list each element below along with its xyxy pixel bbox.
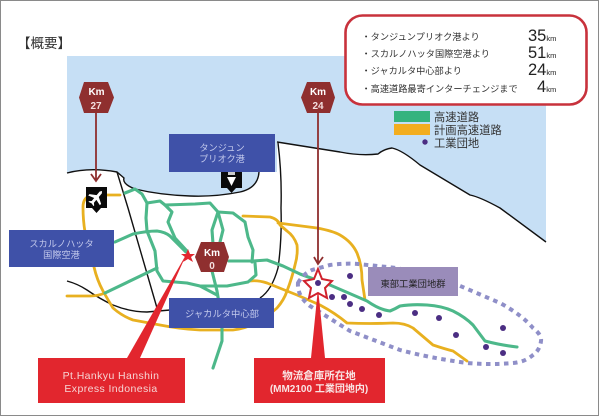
icon: port [221,172,242,193]
label: Soekarno-Hatta airport [9,230,114,267]
marker: Km 27 with arrow: 27 [90,101,102,112]
distance table: 35km [528,27,556,45]
expressways (green) [105,189,517,368]
callout: Pt. Hankyu Hanshin Express Indonesia [38,358,185,403]
label: eastern industrial estates [368,267,458,296]
map: sea area [67,56,546,242]
marker: Km 24 with arrow [301,82,335,264]
callout wedge: warehouse [311,288,325,358]
planned expressways (orange) [67,195,467,361]
industrial zone dotted outline [298,264,541,364]
marker: Km 0: 0 [209,261,215,272]
star marker: Hankyu office [181,249,195,262]
marker: Km 0: Km [204,248,220,259]
label: Tanjung Priok port: タンジュン [199,143,245,153]
label: Jakarta centre: ジャカルタ中心部 [185,308,259,319]
callout: Pt. Hankyu Hanshin Express Indonesia: Express Indonesia [64,383,158,395]
callout: Pt. Hankyu Hanshin Express Indonesia: Pt.Hankyu Hanshin [63,370,159,382]
star marker: warehouse [304,269,332,298]
marker: Km 24 with arrow: Km [310,87,326,98]
marker: Km 27 with arrow: Km [88,87,105,98]
label: Soekarno-Hatta airport: 国際空港 [43,249,80,260]
label: Jakarta centre [169,298,274,328]
distance table: ・高速道路最寄インターチェンジまで [362,83,518,94]
distance table: 51km [528,44,556,62]
callout wedge: Hankyu [127,253,187,358]
distance table: 4km [537,78,556,96]
callout: warehouse location: (MM2100 工業団地内) [270,382,368,395]
callout: warehouse location: 物流倉庫所在地 [282,369,356,382]
legend: 計画高速道路 [434,123,502,137]
distance table: ・スカルノハッタ国際空港より [362,48,490,59]
icon: airport [85,186,108,213]
distance table: ・タンジュンプリオク港より [362,31,480,42]
label: Tanjung Priok port [169,134,275,172]
marker: Km 27 with arrow [79,82,114,181]
title: 【概要】 [17,36,71,51]
legend: 工業団地 [434,137,479,150]
legend: 高速道路 [434,110,479,124]
legend [394,110,502,150]
callout: warehouse location [254,358,385,403]
distance table: 24km [528,61,556,79]
marker: Km 24 with arrow: 24 [312,101,324,112]
marker: Km 0 [195,242,229,272]
label: Tanjung Priok port: プリオク港 [199,153,245,164]
distance table: ・ジャカルタ中心部より [362,65,462,76]
map: coastline and borders [67,142,546,312]
label: Soekarno-Hatta airport: スカルノハッタ [29,239,94,249]
distance table [346,16,586,104]
label: eastern industrial estates: 東部工業団地群 [380,278,446,289]
industrial estate dots [329,273,506,356]
